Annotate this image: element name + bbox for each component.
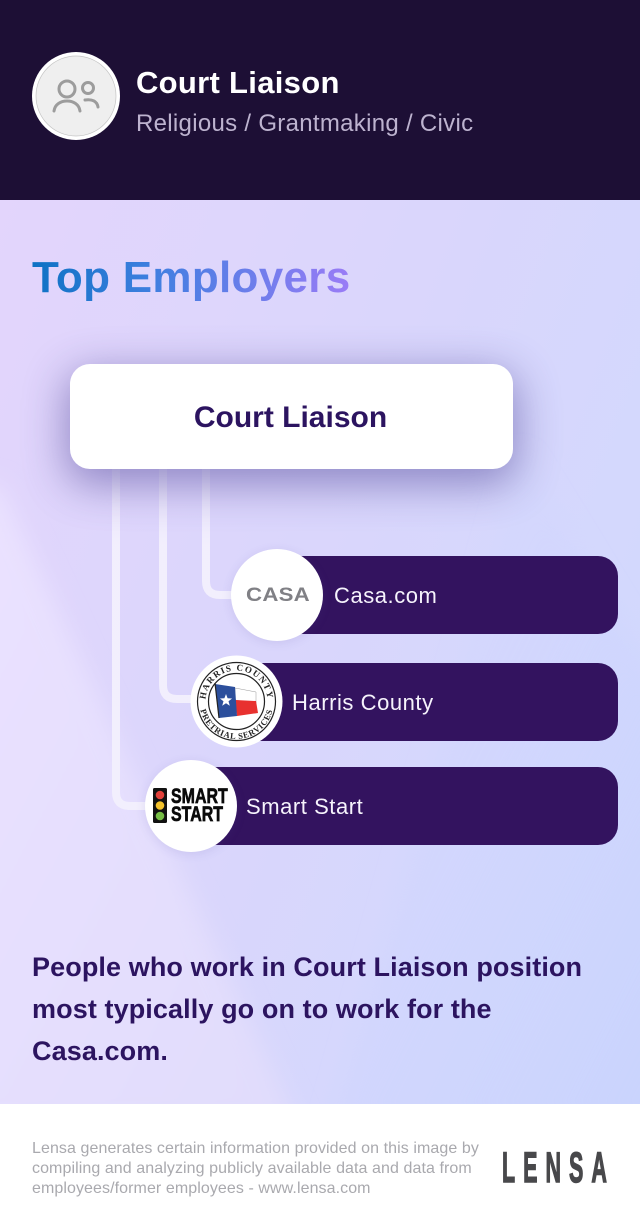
header subtitle: Religious / Grantmaking / Civic <box>136 110 473 137</box>
logo: LENSA: LENSA <box>502 1144 615 1192</box>
summary text <box>32 952 582 1066</box>
employer bar: Smart Start <box>246 794 363 819</box>
logo: Harris County seal: HARRIS COUNTY <box>200 664 274 700</box>
connector lines <box>112 474 231 810</box>
summary text: Casa.com. <box>32 1036 168 1066</box>
wordmark: START <box>171 803 223 826</box>
employer bar <box>276 556 618 634</box>
footer <box>0 1104 640 1232</box>
disclaimer text: Lensa generates certain information provided on this image by <box>32 1140 479 1157</box>
disclaimer text: employees/former employees - www.lensa.com <box>32 1180 371 1197</box>
wordmark: SMART <box>171 785 228 808</box>
background light facets <box>0 499 278 1104</box>
icon: people avatar <box>32 52 120 140</box>
logo: CASA <box>231 549 323 641</box>
header title: Court Liaison <box>136 65 340 100</box>
summary text: People who work in Court Liaison position <box>32 952 582 982</box>
employer row: Casa.com <box>230 549 618 643</box>
section heading: Top Employers <box>32 253 350 302</box>
root card: Court Liaison <box>194 401 387 434</box>
disclaimer text: compiling and analyzing publicly available data and data from <box>32 1160 472 1177</box>
root card <box>70 364 513 469</box>
logo: Smart Start <box>145 760 237 852</box>
main panel: top employers <box>0 200 640 1104</box>
employer row: Smart Start <box>144 760 618 854</box>
employer bar: Casa.com <box>334 583 437 608</box>
employer bar <box>236 663 618 740</box>
wordmark <box>171 785 228 826</box>
traffic light <box>153 788 167 823</box>
employer bar: Harris County <box>292 690 434 715</box>
header band <box>0 0 640 200</box>
employer row: Harris County <box>190 656 618 748</box>
employer bar <box>190 767 618 844</box>
logo: CASA: CASA <box>246 585 310 606</box>
disclaimer text <box>32 1140 479 1197</box>
logo: Harris County seal: PRETRIAL SERVICES <box>200 708 272 739</box>
logo: Harris County seal <box>190 656 282 748</box>
summary text: most typically go on to work for the <box>32 994 492 1024</box>
